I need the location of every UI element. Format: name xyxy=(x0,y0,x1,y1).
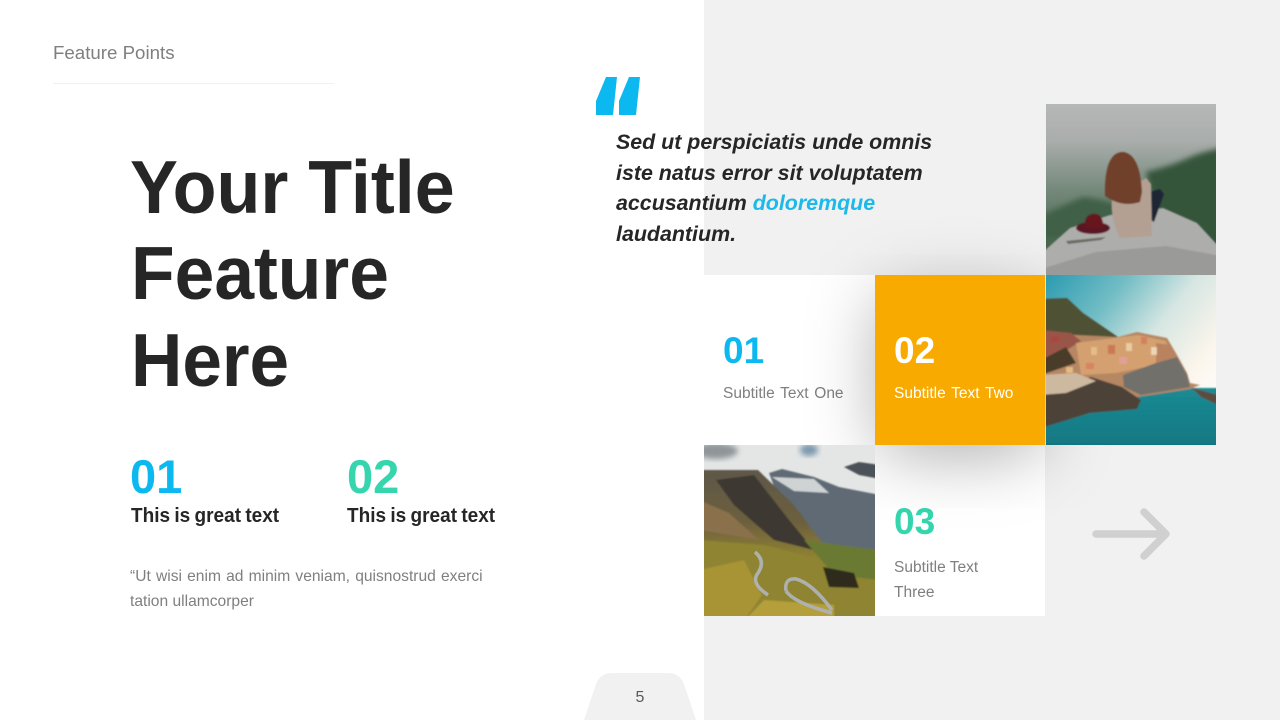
body quote text: tation ullamcorper xyxy=(130,593,254,610)
photo: woman on rock xyxy=(1046,104,1216,275)
tile 02 subtitle: Subtitle Text Two xyxy=(894,385,1013,402)
quote text: iste natus error sit voluptatem xyxy=(616,160,923,184)
page number: 5 xyxy=(636,689,644,706)
photo: mountain road xyxy=(704,445,875,616)
number 02: 02 xyxy=(347,450,399,503)
tile 03 subtitle: Subtitle Text xyxy=(894,559,978,576)
header: Feature Points: Feature Points xyxy=(53,42,175,62)
title: Feature xyxy=(131,231,389,315)
tile 01 subtitle: Subtitle Text One xyxy=(723,385,844,402)
body quote text xyxy=(130,568,483,610)
number 01: 01 xyxy=(130,450,182,503)
left point 02 xyxy=(347,450,495,527)
header divider xyxy=(53,83,334,84)
label 01: This is great text xyxy=(131,505,279,527)
tile 03 xyxy=(875,445,1045,616)
title xyxy=(130,145,455,402)
tile 02 xyxy=(875,275,1045,445)
title: Your Title xyxy=(130,145,455,229)
icon: quote mark xyxy=(596,77,640,115)
body quote text: “Ut wisi enim ad minim veniam, quisnostrud exerci xyxy=(130,568,483,585)
tile 03 number: 03 xyxy=(894,501,935,542)
quote text: accusantium doloremque xyxy=(616,190,875,214)
quote text xyxy=(616,130,932,246)
icon: arrow xyxy=(1092,508,1170,560)
tile 03 subtitle xyxy=(894,559,978,601)
title: Here xyxy=(131,318,289,402)
label 02: This is great text xyxy=(347,505,495,527)
tile 03 subtitle: Three xyxy=(894,584,934,601)
quote text: Sed ut perspiciatis unde omnis xyxy=(616,130,932,154)
photo: cliffside village xyxy=(1046,275,1216,445)
page number tab xyxy=(584,673,696,720)
tile 01 xyxy=(704,275,875,445)
left point 01 xyxy=(130,450,279,527)
tile 02 number: 02 xyxy=(894,330,935,371)
panel: grey right background xyxy=(704,0,1280,720)
quote text: laudantium. xyxy=(616,222,736,246)
tile 01 number: 01 xyxy=(723,330,764,371)
